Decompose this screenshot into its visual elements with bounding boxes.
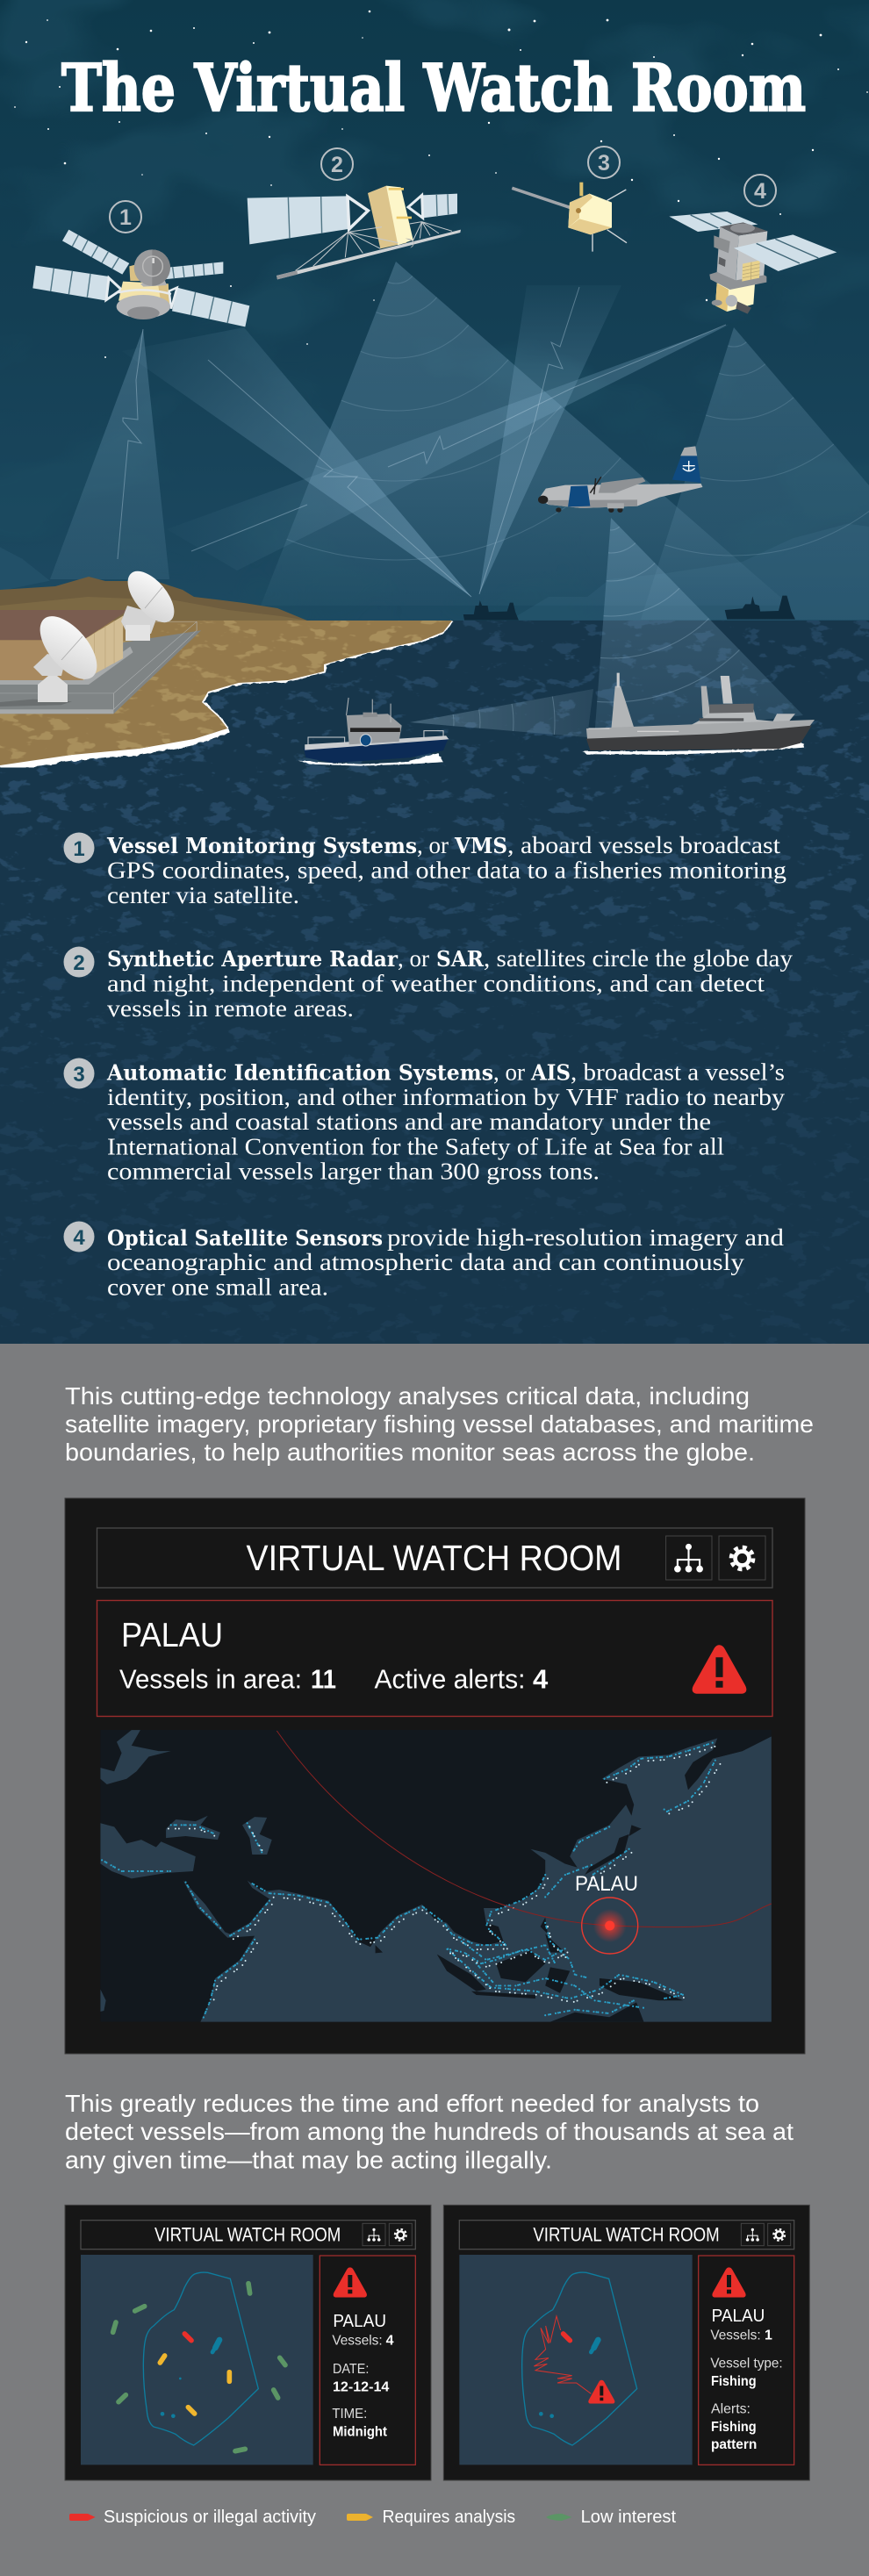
Palau marker: PALAU	[575, 1872, 638, 1896]
ground station platform	[0, 621, 201, 714]
text block 1: VMS: , aboard vessels broadcast	[507, 832, 781, 858]
satellite numbers: 3	[598, 151, 610, 176]
dark distant ship right	[725, 596, 795, 620]
vessel detail box right: Fishing	[711, 2374, 757, 2389]
dark distant ship left	[463, 600, 519, 621]
alert summary box: 4	[533, 1664, 549, 1694]
text block 2: SAR: vessels in remote areas.	[107, 995, 354, 1022]
text block 4: optical sensors: cover one small area.	[107, 1274, 328, 1301]
legend: Suspicious or illegal activity	[104, 2508, 316, 2527]
paragraph: analyst time: detect vessels—from among the hundreds of thousands at sea at	[65, 2118, 794, 2145]
satellite numbers: 4	[754, 179, 766, 204]
vessel detail box left	[320, 2256, 415, 2465]
text block 3: AIS: commercial vessels larger than 300 gross tons.	[107, 1159, 600, 1185]
radar dish large	[30, 606, 107, 702]
paragraph: analyst time	[65, 2090, 794, 2173]
vessel map left	[81, 2255, 313, 2465]
panel: main dashboard	[65, 1498, 805, 2054]
alert summary box: 11	[311, 1664, 336, 1694]
dashboard title bar: VIRTUAL WATCH ROOM	[246, 1538, 621, 1578]
background: night sky	[0, 0, 869, 621]
alert summary box: Vessels in area:	[119, 1664, 302, 1694]
satellite numbers: 2	[331, 153, 343, 177]
vessel detail box left: TIME:	[332, 2407, 367, 2422]
legend: Low interest	[581, 2508, 677, 2527]
beam: aircraft to vessel	[595, 518, 803, 728]
text block 2: SAR: Synthetic Aperture Radar	[107, 946, 398, 972]
intro paragraph: satellite imagery, proprietary fishing vessel databases, and maritime	[65, 1410, 814, 1438]
text block 2: SAR: SAR	[436, 946, 485, 972]
vessel detail box right: 1	[765, 2328, 772, 2343]
satellite numbers	[119, 151, 766, 230]
icon: anchor on tail	[683, 461, 695, 471]
vessel detail box right: pattern	[711, 2437, 757, 2452]
vessel detail box right: Fishing	[711, 2420, 757, 2435]
beam: patrol boat to vessel	[411, 689, 593, 737]
text block 1: VMS	[63, 832, 786, 908]
text block 3: AIS: AIS	[530, 1060, 571, 1085]
text block 3: AIS	[63, 1058, 786, 1185]
paragraph: analyst time: any given time—that may be acting illegally.	[65, 2147, 552, 2173]
panel: small dashboard right	[443, 2205, 809, 2480]
vessel detail box left: 4	[386, 2334, 394, 2349]
text block 2: SAR: , satellites circle the globe day	[484, 945, 794, 972]
vessel dots	[102, 1742, 715, 2019]
text block 1: VMS: VMS	[454, 833, 507, 858]
signal lightning lines	[118, 287, 726, 597]
text block 3: AIS: International Convention for the Safety of Life at Sea for all	[107, 1134, 724, 1160]
text block 2: SAR: , or	[398, 945, 429, 972]
text block 3: AIS: , or	[493, 1058, 525, 1085]
text block 4: optical sensors: oceanographic and atmospheric data and can continuously	[107, 1249, 745, 1275]
title bar right: VIRTUAL WATCH ROOM	[533, 2223, 720, 2245]
background: grey lower section	[0, 1344, 869, 2576]
text block 2: SAR: 2	[73, 951, 85, 975]
title bar left	[81, 2221, 415, 2250]
intro paragraph: boundaries, to help authorities monitor seas across the globe.	[65, 1439, 755, 1466]
text block 2: SAR	[63, 945, 794, 1022]
vessel detail box right: Alerts:	[711, 2401, 750, 2416]
text block 2: SAR: and night, independent of weather conditions, and can detect	[107, 971, 765, 997]
text block 1: VMS: Vessel Monitoring Systems	[106, 833, 417, 858]
satellite number badges	[110, 147, 776, 233]
alert summary box	[97, 1601, 772, 1717]
text block 1: VMS: center via satellite.	[107, 882, 299, 908]
satellite 4	[669, 212, 837, 314]
text block 3: AIS: identity, position, and other information by VHF radio to nearby	[107, 1084, 786, 1110]
alert summary box: PALAU	[121, 1617, 223, 1654]
text block 3: AIS: , broadcast a vessel’s	[571, 1058, 785, 1085]
satellite numbers: 1	[119, 205, 132, 230]
text block 4: optical sensors	[63, 1222, 785, 1301]
text block 4: optical sensors: provide high-resolution imagery and	[387, 1224, 785, 1251]
vessel detail box right	[699, 2256, 794, 2465]
text block 3: AIS: 3	[73, 1063, 85, 1087]
paragraph: analyst time: This greatly reduces the time and effort needed for analysts to	[65, 2090, 759, 2117]
vessel detail box right: PALAU	[712, 2307, 765, 2326]
radar dish small	[119, 563, 183, 641]
satellite 3	[512, 183, 627, 252]
fishing vessel	[582, 673, 815, 755]
aircraft	[538, 446, 702, 513]
satellite 2	[248, 186, 461, 279]
vessel detail box right: Vessels:	[710, 2328, 761, 2343]
title bar right	[459, 2221, 794, 2250]
vessel detail box left: Midnight	[333, 2425, 388, 2440]
intro paragraph: This cutting-edge technology analyses critical data, including	[65, 1382, 750, 1410]
text block 1: VMS: GPS coordinates, speed, and other data to a fisheries monitoring	[107, 857, 786, 883]
text block 1: VMS: 1	[73, 837, 85, 861]
world map	[100, 1730, 772, 2022]
text block 3: AIS: Automatic Identification Systems	[106, 1060, 493, 1085]
Palau marker	[575, 1872, 638, 1954]
vessel detail box right: Vessel type:	[710, 2356, 783, 2371]
text block 4: optical sensors: 4	[73, 1226, 85, 1250]
text block 3: AIS: vessels and coastal stations and are mandatory under the	[107, 1109, 711, 1135]
vessel map right	[459, 2255, 693, 2465]
vessel detail box left: Vessels:	[332, 2334, 383, 2349]
vessel detail box left: 12-12-14	[333, 2379, 389, 2394]
text block 4: optical sensors: Optical Satellite Sensors	[107, 1225, 383, 1251]
sea	[0, 621, 869, 1344]
great-circle track	[276, 1731, 772, 1927]
text block 1: VMS: , or	[417, 832, 449, 858]
stars	[14, 11, 868, 358]
ground station building	[0, 610, 128, 680]
vessel detail box left: DATE:	[333, 2362, 369, 2377]
signal beams	[50, 262, 869, 606]
dashboard title bar	[97, 1528, 772, 1588]
patrol boat	[298, 698, 449, 766]
title bar left: VIRTUAL WATCH ROOM	[154, 2223, 341, 2245]
alert summary box: Active alerts:	[374, 1664, 525, 1694]
vessel detail box left: PALAU	[333, 2312, 386, 2331]
coastline with ground station	[0, 570, 453, 767]
legend: Requires analysis	[383, 2508, 515, 2527]
satellite 1	[32, 230, 249, 326]
legend	[69, 2508, 677, 2527]
panel: small dashboard left	[65, 2205, 431, 2480]
intro paragraph	[65, 1382, 814, 1466]
